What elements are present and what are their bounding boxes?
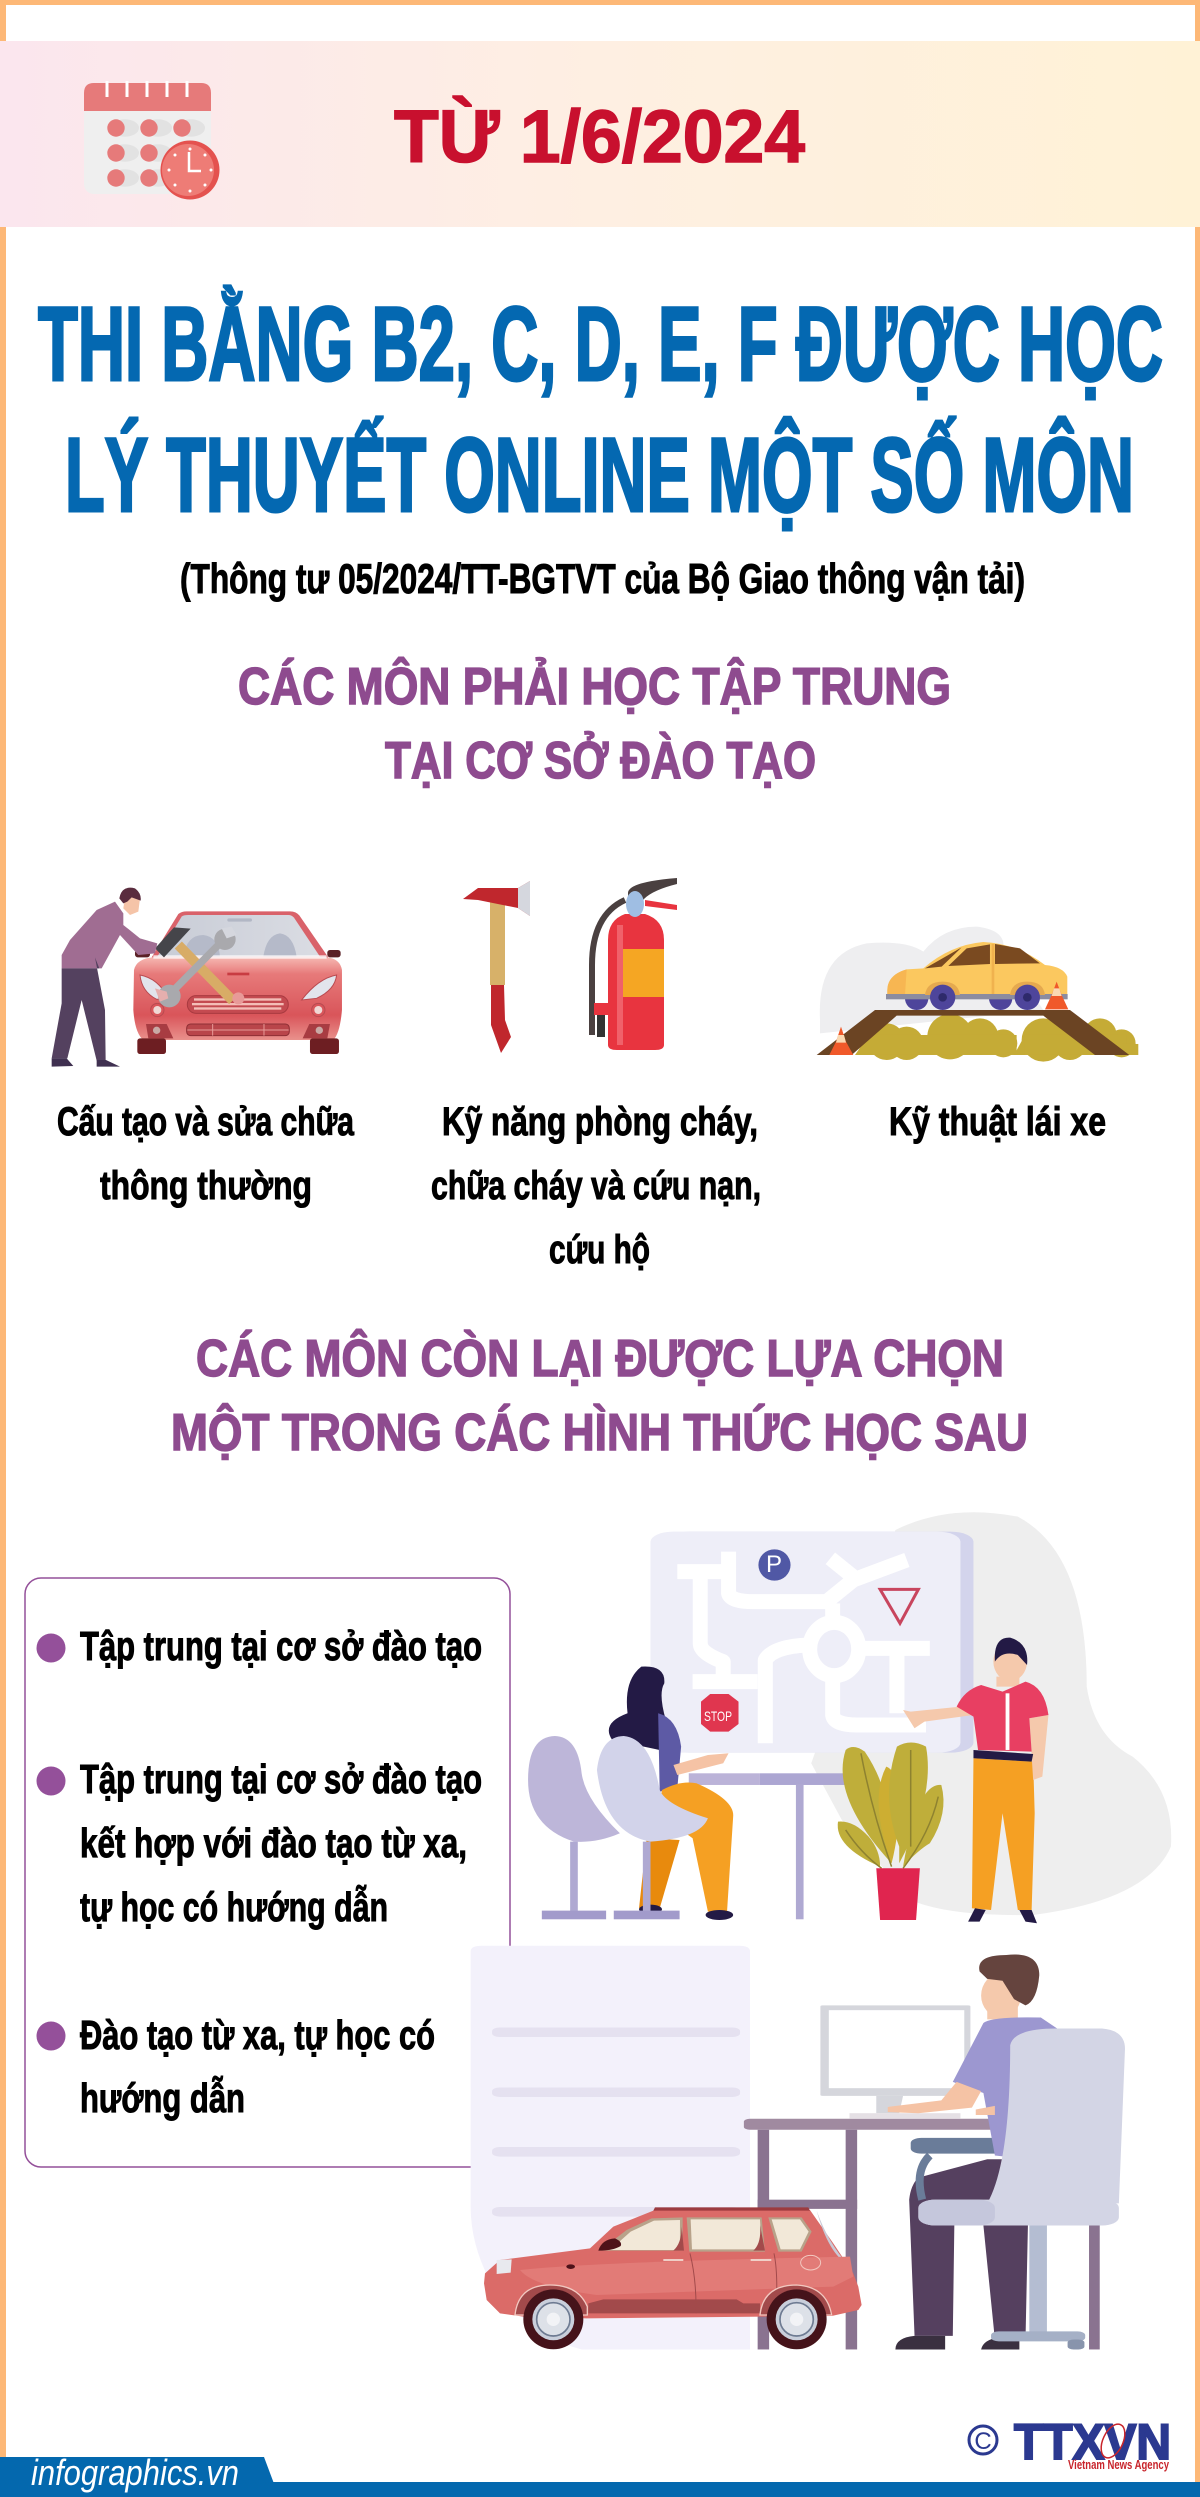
- logo: TTXVN Vietnam News Agency: TTXVN: [1014, 2414, 1171, 2470]
- panel: fire safety subject: [431, 878, 761, 1272]
- option 3: Đào tạo từ xa, tự học có: [80, 2012, 435, 2058]
- main title: [38, 285, 1163, 534]
- option 3: hướng dẫn: [80, 2075, 245, 2121]
- caption: fire safety: chữa cháy và cứu nạn,: [431, 1164, 761, 1208]
- heading: remaining subjects: MỘT TRONG CÁC HÌNH THỨC HỌC SAU: [171, 1403, 1028, 1462]
- option 3: [36, 2012, 435, 2121]
- panel: car repair subject: [52, 888, 355, 1208]
- caption: car repair: Cấu tạo và sửa chữa: [57, 1100, 355, 1144]
- caption: fire safety: Kỹ năng phòng cháy,: [442, 1100, 758, 1144]
- caption: fire safety: [431, 1100, 761, 1272]
- icon: mechanic repairing red car: [52, 888, 342, 1067]
- icon: fire extinguisher: [592, 878, 677, 1050]
- illustration: classroom with road map board: [528, 1512, 1171, 1923]
- caption: car repair: thông thường: [100, 1164, 312, 1208]
- caption: fire safety: cứu hộ: [549, 1228, 650, 1272]
- label: stop sign text: STOP: [704, 1708, 732, 1724]
- option 2: kết hợp với đào tạo từ xa,: [80, 1820, 467, 1866]
- panel: study format options: [25, 1578, 510, 2167]
- heading: mandatory subjects: [238, 657, 951, 790]
- footer bar with website: infographics.vn: [31, 2452, 239, 2493]
- option 1: Tập trung tại cơ sở đào tạo: [80, 1623, 482, 1669]
- icon: yellow car on test ramp: [817, 927, 1138, 1062]
- date banner: [0, 41, 1200, 227]
- option 2: Tập trung tại cơ sở đào tạo: [80, 1756, 482, 1802]
- caption: driving technique: Kỹ thuật lái xe: [889, 1100, 1106, 1144]
- heading: mandatory subjects: CÁC MÔN PHẢI HỌC TẬP TRUNG: [238, 657, 951, 716]
- option 2: tự học có hướng dẫn: [80, 1884, 388, 1930]
- option 1: [36, 1623, 482, 1669]
- panel: driving technique subject: [817, 927, 1138, 1144]
- option 2: [36, 1756, 482, 1930]
- illustration: online study at computer: [471, 1946, 1125, 2349]
- heading: remaining subjects: [171, 1329, 1028, 1462]
- icon: fire axe: [463, 881, 530, 1053]
- logo: TTXVN Vietnam News Agency: C: [974, 2428, 992, 2455]
- illustration: red SUV: [484, 2207, 862, 2349]
- label: parking sign letter: P: [766, 1551, 782, 1578]
- heading: remaining subjects: CÁC MÔN CÒN LẠI ĐƯỢC LỰA CHỌN: [196, 1329, 1004, 1388]
- date heading: TỪ 1/6/2024: [394, 95, 805, 178]
- heading: mandatory subjects: TẠI CƠ SỞ ĐÀO TẠO: [385, 731, 816, 790]
- caption: car repair: [57, 1100, 355, 1208]
- footer bar with website: [0, 2452, 1200, 2497]
- icon: calendar with clock: [84, 81, 220, 200]
